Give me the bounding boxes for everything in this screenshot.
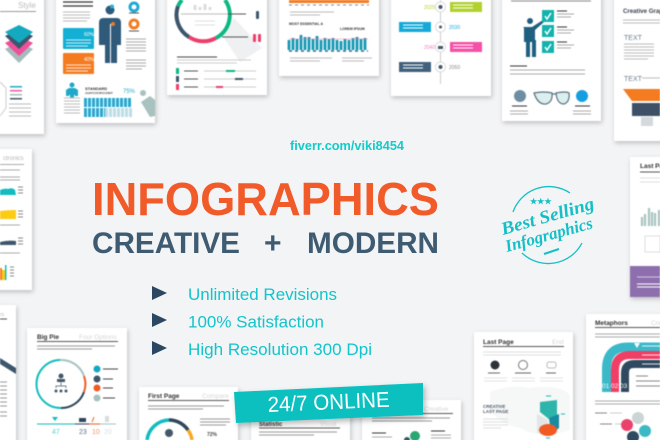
panel: first page card: First Page [148,393,180,400]
list: feature bullets: Unlimited Revisions [188,286,337,304]
banner: 24/7 online: 24/7 ONLINE [267,388,390,417]
panel: creative graphic card [614,0,660,141]
chart: segmented bar with numbers: 23 [79,429,87,436]
text: fiverr link: fiverr.com/viki8454 [290,138,405,153]
badge: best selling infographics: Infographics [502,213,595,256]
panel: creative graphic card: TEXT [624,35,643,42]
chart: segmented bar with numbers: 10 [92,429,100,436]
chart: range sliders [176,68,256,90]
chart: navy area [0,241,16,245]
chart: segmented bar with numbers: 20 [104,429,112,436]
icon: blue circle left [514,90,526,102]
icon: green puzzle [404,431,420,440]
title: infographics: INFOGRAPHICS [92,173,439,225]
panel: statistic card: Visual [320,422,336,428]
panel: metaphors card [586,314,660,440]
chart: orange band [289,0,369,3]
icon: speech bubbles [547,362,556,368]
callout: lime box [450,2,482,12]
panel: big pie card: Four Options [79,334,117,341]
panel: creative graphic card: TEXT [624,76,643,83]
chart: curved ribbons [606,347,660,392]
panel: last page card bottom: Last Page [483,339,514,346]
panel: timeline card: 2020 [424,5,435,11]
icon: dark circle [490,360,500,370]
callout: pink box [450,42,482,52]
chart: people pictogram [84,102,132,112]
panel: timeline card: 2040 [424,45,435,51]
chart: donut ring [176,0,230,41]
panel: creative card [362,400,461,440]
panel: metaphors card: 02 [611,383,619,390]
panel: human body card: ALWAYS WORKS GREAT [85,91,113,95]
badge: best selling infographics: Best Selling [498,193,596,239]
icon: puzzle pieces [621,412,651,440]
chart: teal area [0,188,16,195]
panel: last page card bottom: End [552,339,564,346]
badge: best selling infographics: ★★★ [530,197,552,206]
icons: timeline nodes [436,2,446,72]
heading: creative + modern: CREATIVE [92,227,240,260]
panel: first page card [139,387,238,440]
panel: bar chart card: LOREM IPSUM [340,27,365,31]
panel: bar chart card: MOST ESSENTIAL A [289,22,324,26]
badge: best selling infographics [498,187,596,264]
panel: metaphors card: 01 [602,383,610,390]
list: feature bullets: High Resolution 300 Dpi [188,341,372,359]
panel: human body card: STANDARD [85,86,107,91]
chart: segmented bar with numbers [37,416,116,436]
chart: grey bars [642,208,659,226]
panel: big pie card: Big Pie [37,334,59,341]
panel: presenter card [502,0,601,121]
panel: metaphors card: Metaphors [595,320,628,327]
icon: blue circle right [576,90,588,102]
panel: orange stat box: 40% [84,57,95,63]
panel: purple footer [630,266,660,297]
icon: pink people [253,34,261,42]
chart: big pie ring [36,360,85,408]
icon: dark person [256,11,259,19]
heading: creative + modern: MODERN [307,227,439,260]
panel: statistic card [251,410,350,440]
icon: presenter pointing [523,18,544,57]
panel: layers card top left: Style [18,1,36,10]
panel: human body card: 75% [123,89,136,95]
callout: blue box [399,22,431,32]
chart: 3D isometric pie [537,400,559,436]
banner: 24/7 online [234,383,423,423]
panel: bottom left card [0,305,16,440]
panel: human body card [56,0,155,123]
panel: last page card bottom [474,332,573,440]
icon: grey walking figure [140,90,155,117]
panel: first page card: 72% [207,432,218,438]
list: feature bullets: 100% Satisfaction [188,314,324,332]
panel: timeline card: 2030 [449,25,460,31]
icon: stacked layers [5,25,33,63]
chart: segmented bar with numbers: 47 [52,429,60,436]
panel: timeline card: 2050 [449,65,460,71]
panel: metaphors card: 03 [620,383,628,390]
icon: person with arms [66,82,78,98]
panel: timeline card [391,0,491,96]
panel: ring chart card [167,0,267,95]
chart: column chart [289,35,368,51]
panel: big pie card [27,328,127,440]
long shadow of ring [222,18,262,62]
legend: four options [94,366,118,402]
chart: yellow area [0,210,16,219]
callout: navy box [399,62,431,72]
panel: blue stat box: 60% [84,32,95,38]
icon: human figure [99,4,121,64]
panel: bar chart card [279,0,379,76]
icon: glasses [534,92,569,104]
map backdrop [490,387,570,435]
icon: blue badge [130,3,138,11]
panel: last page card bottom: LAST PAGE [483,409,508,414]
panel: electronics card left [0,149,32,290]
panel: statistic card: Statistic [259,422,283,428]
panel: first page card: Compare [202,393,229,400]
panel: last page card right [630,157,660,297]
panel: layers card top left [0,0,44,134]
heading: creative + modern: + [264,227,282,260]
chart: small bars [0,265,6,280]
icon: outline circle [518,360,528,370]
icons: check boxes [542,10,554,53]
list: feature bullets [152,286,372,359]
icon: orange badge [130,20,138,28]
heading: creative + modern [92,227,439,260]
icon: laptop [623,89,660,126]
icon: bullet arrow [152,286,167,300]
panel: last page card bottom: CREATIVE [483,404,505,409]
icon: org chart [54,374,68,392]
panel: electronics card left: ctronics [3,156,24,162]
panel: creative card: Creative [424,406,449,413]
panel: bottom left card: rs [0,312,5,318]
chart: first page ring [147,420,192,440]
